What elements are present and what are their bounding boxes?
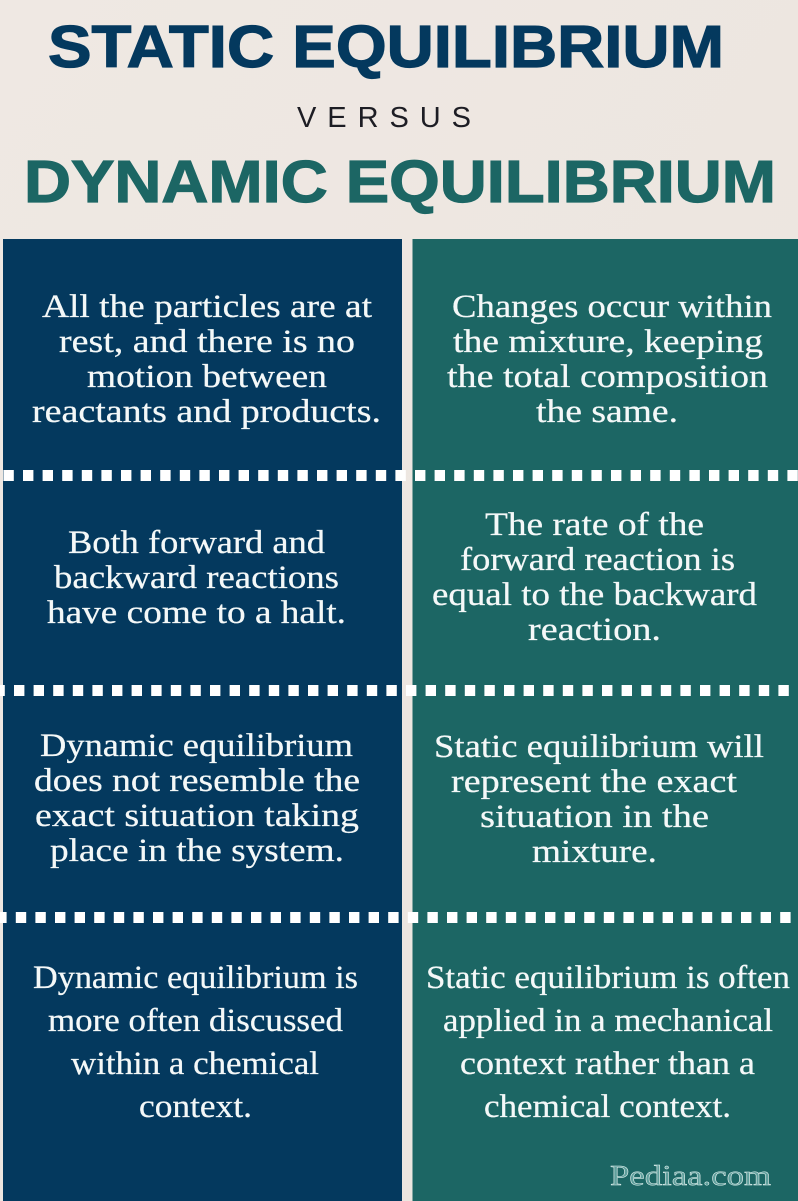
- text block: static row 1: rest, and there is no: [59, 324, 355, 360]
- text block: dynamic row 4: Static equilibrium is often: [426, 960, 790, 996]
- title: static equilibrium: STATIC EQUILIBRIUM: [48, 14, 724, 80]
- text block: dynamic row 1: the same.: [536, 394, 678, 430]
- text block: dynamic row 2: reaction.: [528, 612, 661, 648]
- text block: dynamic row 4: chemical context.: [484, 1089, 731, 1125]
- text block: static row 1: motion between: [87, 359, 327, 395]
- subtitle: versus: VERSUS: [297, 102, 471, 134]
- text block: static row 3: place in the system.: [50, 833, 344, 869]
- text block: dynamic row 2: [432, 507, 758, 648]
- text block: static row 4: within a chemical: [71, 1046, 319, 1082]
- text block: static row 2: Both forward and: [68, 525, 326, 561]
- text block: dynamic row 3: situation in the: [480, 799, 709, 835]
- text block: dynamic row 3: Static equilibrium will: [434, 729, 764, 765]
- text block: static row 1: All the particles are at: [42, 289, 372, 325]
- text block: static row 2: backward reactions: [54, 560, 339, 596]
- text block: static row 4: Dynamic equilibrium is: [33, 960, 358, 996]
- text block: dynamic row 4: context rather than a: [460, 1046, 755, 1082]
- text block: static row 3: exact situation taking: [35, 798, 359, 834]
- text block: static row 3: Dynamic equilibrium: [40, 728, 353, 764]
- dotted divider: row 3: [0, 912, 798, 923]
- text block: dynamic row 1: the total composition: [447, 359, 768, 395]
- text block: dynamic row 3: mixture.: [532, 834, 657, 870]
- text block: static row 2: have come to a halt.: [47, 595, 346, 631]
- text block: dynamic row 3: represent the exact: [451, 764, 737, 800]
- text block: dynamic row 1: Changes occur within: [452, 289, 772, 325]
- panel: dynamic column background: [412, 239, 798, 1201]
- text block: static row 4: [33, 960, 358, 1125]
- dotted divider: row 2: [0, 685, 798, 696]
- text block: dynamic row 3: [434, 729, 764, 870]
- text block: dynamic row 2: equal to the backward: [432, 577, 758, 613]
- text block: dynamic row 4: applied in a mechanical: [443, 1003, 773, 1039]
- text block: static row 1: [32, 289, 381, 430]
- text block: dynamic row 1: [447, 289, 772, 430]
- text block: dynamic row 2: The rate of the: [485, 507, 704, 543]
- text block: static row 4: context.: [139, 1089, 252, 1125]
- title: dynamic equilibrium: DYNAMIC EQUILIBRIUM: [24, 149, 776, 215]
- text block: dynamic row 4: [426, 960, 790, 1125]
- text block: static row 3: does not resemble the: [34, 763, 360, 799]
- dotted divider: row 1: [3, 470, 798, 481]
- text block: static row 3: [34, 728, 360, 869]
- text block: static row 1: reactants and products.: [32, 394, 381, 430]
- text block: static row 4: more often discussed: [48, 1003, 344, 1039]
- text block: dynamic row 1: the mixture, keeping: [453, 324, 763, 360]
- panel: static column background: [3, 239, 402, 1201]
- text block: dynamic row 2: forward reaction is: [460, 542, 735, 578]
- logo: Pediaa.com: Pediaa.com: [610, 1160, 772, 1192]
- text block: static row 2: [47, 525, 346, 631]
